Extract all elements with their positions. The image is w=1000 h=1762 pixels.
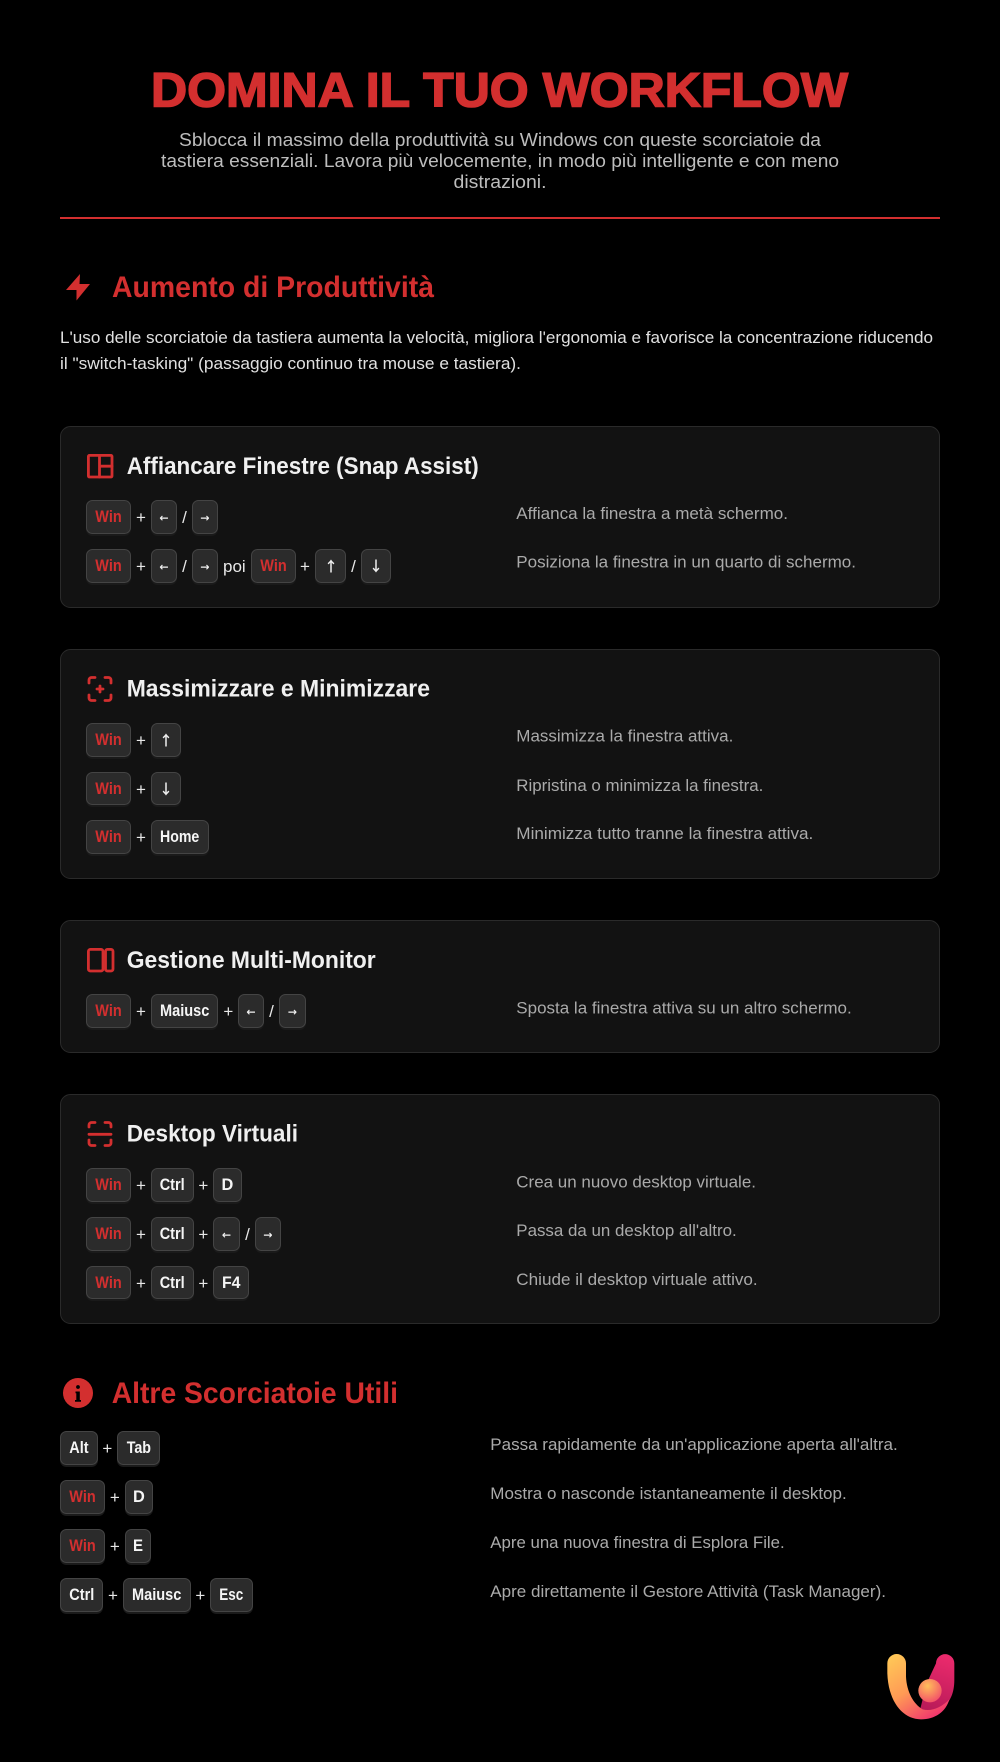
shortcut row: quarter screen: Win: [95, 557, 122, 575]
shortcut row: maximize: [86, 724, 180, 756]
shortcut row: task manager: Esc: [219, 1586, 243, 1604]
shortcut row: close desktop: +: [198, 1274, 208, 1293]
shortcut row: quarter screen: +: [136, 557, 146, 576]
shortcut row: close desktop: [86, 1266, 248, 1298]
section: other shortcuts: [60, 1377, 898, 1612]
shortcut row: quarter screen: /: [182, 557, 187, 576]
text block: productivity description: L'uso delle scorciatoie da tastiera aumenta la velocità, migliora l'ergonomia e favorisce la concentrazione riducendo: [60, 328, 933, 347]
shortcut row: move to other screen: →: [288, 1006, 297, 1018]
shortcut row: restore: +: [136, 780, 146, 799]
panel: multi monitor: [60, 920, 940, 1052]
shortcut row: switch desktop: +: [198, 1225, 208, 1244]
description: switch desktop: Passa da un desktop all'altro.: [516, 1221, 737, 1240]
shortcut row: alt tab: +: [102, 1439, 112, 1458]
shortcut row: close desktop: +: [136, 1274, 146, 1293]
shortcut row: task manager: +: [195, 1586, 205, 1605]
panel: maximize and minimize: [60, 650, 940, 878]
shortcut row: minimize all: Home: [160, 828, 199, 846]
shortcut row: task manager: +: [108, 1586, 118, 1605]
shortcut row: quarter screen: poi: [223, 557, 246, 576]
shortcut row: move to other screen: Maiusc: [160, 1002, 209, 1020]
shortcut row: move to other screen: +: [136, 1002, 146, 1021]
description: maximize: Massimizza la finestra attiva.: [516, 726, 733, 746]
shortcut row: quarter screen: +: [300, 557, 310, 576]
subtitle: distrazioni.: [454, 171, 546, 192]
description: minimize all: Minimizza tutto tranne la finestra attiva.: [516, 824, 813, 843]
shortcut row: new desktop: +: [136, 1176, 146, 1195]
description: explorer: Apre una nuova finestra di Esplora File.: [490, 1533, 785, 1552]
shortcut row: explorer: Win: [69, 1537, 96, 1555]
shortcut row: close desktop: Win: [95, 1274, 122, 1292]
shortcut row: show desktop: Win: [69, 1488, 96, 1506]
shortcut row: close desktop: Ctrl: [160, 1274, 185, 1292]
shortcut row: half screen: [86, 500, 218, 534]
shortcut row: explorer: +: [110, 1537, 120, 1556]
shortcut row: task manager: Ctrl: [69, 1586, 94, 1604]
description: alt tab: Passa rapidamente da un'applicazione aperta all'altra.: [490, 1435, 898, 1454]
icon: scan frame: [89, 1122, 111, 1146]
description: task manager: Apre direttamente il Gestore Attività (Task Manager).: [490, 1582, 886, 1601]
shortcut row: new desktop: D: [222, 1176, 233, 1194]
shortcut row: switch desktop: Win: [95, 1225, 122, 1243]
shortcut row: switch desktop: ←: [222, 1228, 231, 1242]
shortcut row: quarter screen: ↑: [324, 556, 338, 576]
panel: virtual desktops: [60, 1094, 940, 1324]
text block: productivity description: [60, 328, 933, 373]
shortcut row: show desktop: [60, 1480, 152, 1514]
shortcut row: task manager: [60, 1578, 252, 1612]
shortcut row: quarter screen: /: [351, 557, 356, 576]
panel: snap assist: [60, 426, 940, 608]
shortcut row: move to other screen: /: [269, 1002, 274, 1021]
shortcut row: switch desktop: Ctrl: [160, 1225, 185, 1243]
shortcut row: switch desktop: /: [245, 1225, 250, 1244]
shortcut row: alt tab: Tab: [127, 1439, 151, 1457]
icon: window layout: [88, 455, 112, 477]
shortcut row: maximize: +: [136, 731, 146, 750]
icon: lightning bolt: [66, 274, 90, 300]
shortcut row: switch desktop: +: [136, 1225, 146, 1244]
shortcut row: maximize: Win: [95, 731, 122, 749]
card heading: snap assist: Affiancare Finestre (Snap Assist): [127, 453, 479, 480]
shortcut row: switch desktop: →: [263, 1228, 273, 1242]
shortcut row: move to other screen: Win: [95, 1002, 122, 1020]
description: show desktop: Mostra o nasconde istantaneamente il desktop.: [490, 1484, 847, 1503]
shortcut row: new desktop: +: [198, 1176, 208, 1195]
shortcut row: half screen: Win: [95, 508, 122, 526]
shortcut row: move to other screen: ←: [246, 1006, 256, 1018]
description: quarter screen: Posiziona la finestra in un quarto di schermo.: [516, 552, 856, 572]
shortcut row: quarter screen: ←: [159, 560, 169, 574]
shortcut row: half screen: ←: [159, 512, 169, 524]
title: DOMINA IL TUO WORKFLOW: [151, 64, 849, 118]
card heading: multi monitor: Gestione Multi-Monitor: [127, 947, 376, 974]
shortcut row: alt tab: [60, 1432, 160, 1464]
shortcut row: restore: [86, 772, 180, 804]
shortcut row: quarter screen: [86, 550, 390, 582]
shortcut row: switch desktop: [86, 1218, 280, 1250]
shortcut row: quarter screen: ↓: [369, 556, 383, 576]
description: close desktop: Chiude il desktop virtuale attivo.: [516, 1270, 758, 1289]
shortcut row: quarter screen: →: [200, 560, 210, 574]
shortcut row: maximize: ↑: [159, 730, 173, 750]
card heading: maximize and minimize: Massimizzare e Minimizzare: [127, 676, 430, 703]
shortcut row: alt tab: Alt: [69, 1439, 89, 1457]
shortcut row: new desktop: Ctrl: [160, 1176, 185, 1194]
icon: logo: [887, 1654, 954, 1719]
shortcut row: explorer: [60, 1530, 150, 1562]
heading: productivity: Aumento di Produttività: [112, 271, 435, 304]
shortcut row: move to other screen: +: [223, 1002, 233, 1021]
text block: productivity description: il "switch-tasking" (passaggio continuo tra mouse e tastiera).: [60, 354, 521, 373]
shortcut row: half screen: →: [200, 512, 210, 524]
shortcut row: quarter screen: Win: [260, 557, 287, 575]
shortcut row: half screen: /: [182, 508, 187, 527]
description: restore: Ripristina o minimizza la finestra.: [516, 776, 763, 795]
subtitle: tastiera essenziali. Lavora più velocemente, in modo più intelligente e con meno: [161, 150, 839, 171]
shortcut row: restore: ↓: [159, 780, 173, 800]
shortcut row: show desktop: D: [133, 1488, 145, 1506]
shortcut row: restore: Win: [95, 780, 122, 798]
shortcut row: task manager: Maiusc: [132, 1586, 181, 1604]
subtitle: [161, 129, 839, 192]
section: productivity boost: [60, 271, 933, 373]
description: half screen: Affianca la finestra a metà schermo.: [516, 504, 788, 523]
icon: focus frame with plus: [89, 678, 111, 700]
shortcut row: explorer: E: [133, 1537, 143, 1555]
shortcut row: minimize all: +: [136, 828, 146, 847]
subtitle: Sblocca il massimo della produttività su Windows con queste scorciatoie da: [179, 129, 822, 150]
description: move to other screen: Sposta la finestra attiva su un altro schermo.: [516, 998, 852, 1017]
shortcut row: new desktop: Win: [95, 1176, 122, 1194]
icon: info circle: [63, 1378, 93, 1408]
shortcut row: new desktop: [86, 1168, 242, 1202]
shortcut row: minimize all: Win: [95, 828, 122, 846]
description: new desktop: Crea un nuovo desktop virtuale.: [516, 1172, 756, 1191]
card heading: virtual desktops: Desktop Virtuali: [127, 1121, 298, 1148]
shortcut row: move to other screen: [86, 994, 306, 1028]
shortcut row: show desktop: +: [110, 1488, 120, 1507]
shortcut row: minimize all: [86, 820, 208, 854]
shortcut row: half screen: +: [136, 508, 146, 527]
shortcut row: close desktop: F4: [222, 1274, 241, 1292]
icon: two panels: [88, 949, 113, 971]
heading: other shortcuts: Altre Scorciatoie Utili: [112, 1377, 398, 1410]
